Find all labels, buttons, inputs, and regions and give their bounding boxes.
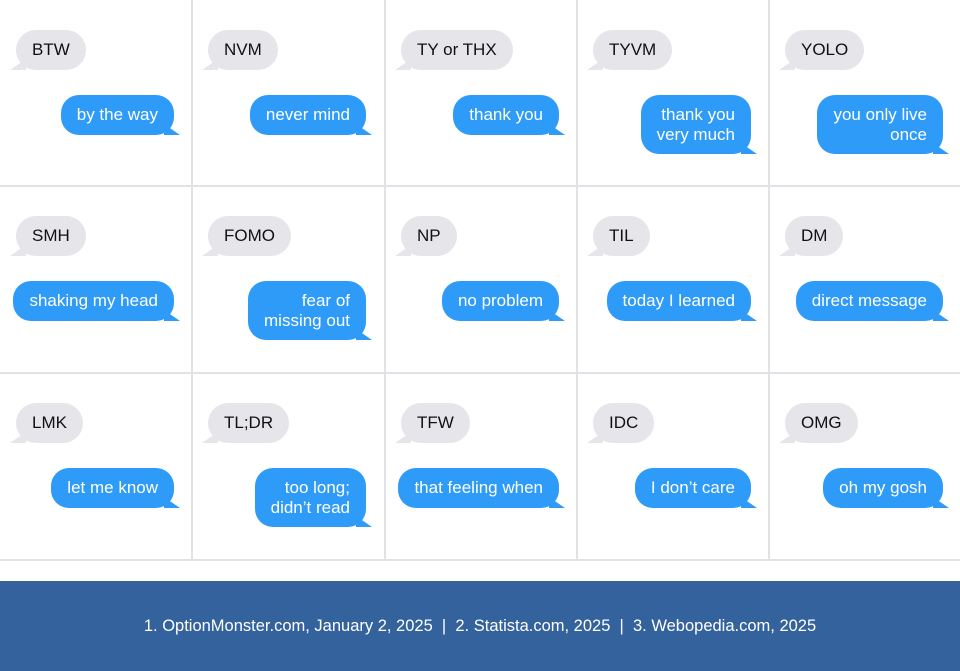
- panel: NVM: never mind: [266, 105, 350, 124]
- panel: YOLO: once: [890, 125, 927, 144]
- panel: OMG: OMG: [801, 413, 842, 432]
- panel: TY: [395, 30, 565, 135]
- panel: YOLO: [779, 30, 949, 154]
- panel: TIL: TIL: [609, 226, 634, 245]
- panel: DM: DM: [801, 226, 827, 245]
- panel: OMG: [779, 403, 949, 508]
- panel: FOMO: FOMO: [224, 226, 275, 245]
- panel: TFW: [395, 403, 565, 508]
- panel: TY: TY or THX: [417, 40, 497, 59]
- panel: DM: [780, 216, 949, 321]
- panel: TFW: that feeling when: [414, 478, 543, 497]
- panel: SMH: [10, 216, 180, 321]
- panel: LMK: LMK: [32, 413, 67, 432]
- panel: LMK: [10, 403, 180, 508]
- panel: YOLO: YOLO: [801, 40, 848, 59]
- panel: BTW: by the way: [77, 105, 158, 124]
- panel: NVM: NVM: [224, 40, 262, 59]
- panel: LMK: let me know: [67, 478, 158, 497]
- panel: OMG: oh my gosh: [839, 478, 927, 497]
- panel: YOLO: you only live: [833, 105, 927, 124]
- panel: FOMO: missing out: [264, 311, 350, 330]
- panel: TLDR: [202, 403, 372, 527]
- panel: TY: thank you: [469, 105, 543, 124]
- panel: NVM: [202, 30, 372, 135]
- panel: NP: no problem: [458, 291, 543, 310]
- panel: IDC: IDC: [609, 413, 638, 432]
- panel: TYVM: TYVM: [609, 40, 656, 59]
- panel: SMH: SMH: [32, 226, 70, 245]
- panel: BTW: [10, 30, 180, 135]
- footer: sources: [0, 581, 960, 671]
- panel: TIL: [588, 216, 757, 321]
- panel: TFW: TFW: [417, 413, 454, 432]
- panel: TLDR: too long;: [285, 478, 350, 497]
- panel: TYVM: very much: [657, 125, 735, 144]
- panel: TLDR: didn’t read: [271, 498, 350, 517]
- panel: IDC: I don’t care: [651, 478, 735, 497]
- panel: FOMO: fear of: [302, 291, 350, 310]
- panel: NP: [396, 216, 565, 321]
- panel: SMH: shaking my head: [29, 291, 158, 310]
- panel: BTW: BTW: [32, 40, 70, 59]
- panel: DM: direct message: [812, 291, 927, 310]
- panel: IDC: [587, 403, 757, 508]
- panel: FOMO: [202, 216, 372, 340]
- footer: sources: 1. OptionMonster.com, January 2, 2025 | 2. Statista.com, 2025 | 3. Webopedia.com, 2025: [144, 617, 816, 635]
- panel: TLDR: TL;DR: [224, 413, 273, 432]
- panel: NP: NP: [417, 226, 441, 245]
- panel: TYVM: thank you: [661, 105, 735, 124]
- panel: TIL: today I learned: [623, 291, 735, 310]
- panel: TYVM: [587, 30, 757, 154]
